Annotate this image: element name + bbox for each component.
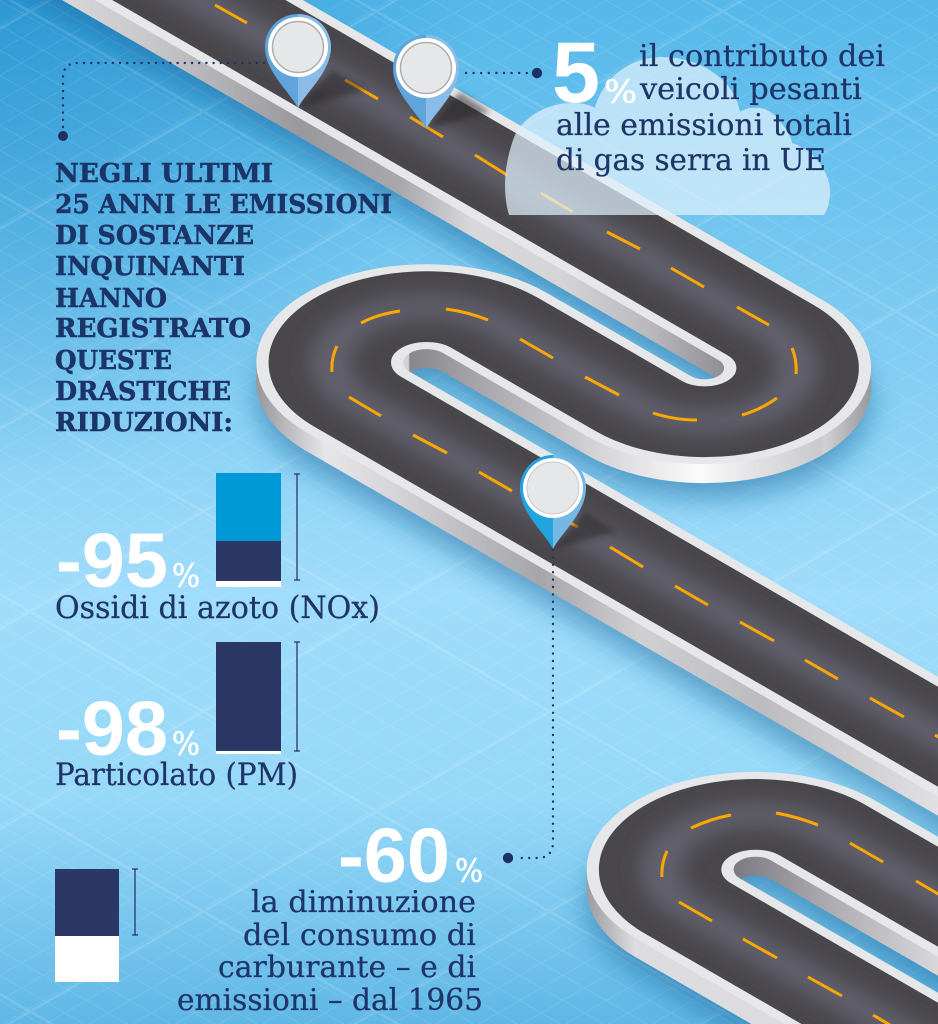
stat: -60% fuel consumption: la diminuzione (251, 885, 476, 920)
heading: DI SOSTANZE (55, 221, 254, 251)
bar chart: particulate (216, 642, 300, 754)
stat: 5% heavy vehicle contribution: veicoli pesanti (639, 72, 862, 107)
pin shadows on road (298, 70, 616, 549)
cloud (505, 57, 830, 215)
stat: -95% NOx (55, 518, 380, 626)
stat: -98% particulate: % (172, 725, 200, 763)
icon: map pin 1 (265, 14, 331, 108)
stat: 5% heavy vehicle contribution: il contributo dei (639, 39, 885, 74)
icon: map pin 2 (393, 35, 459, 129)
heading: QUESTE (55, 346, 172, 376)
stat: -60% fuel consumption (177, 813, 483, 1018)
yellow lane dashes (215, 5, 938, 1024)
heading: NEGLI ULTIMI (55, 159, 273, 189)
bar chart: NOx (216, 473, 300, 587)
stat: -98% particulate: -98 (56, 686, 168, 772)
stat: -95% NOx: % (172, 557, 200, 595)
stat: 5% heavy vehicle contribution: alle emissioni totali (556, 108, 852, 143)
stat: -60% fuel consumption: % (455, 852, 483, 890)
stat: 5% heavy vehicle contribution (552, 25, 885, 178)
stat: -95% NOx: Ossidi di azoto (NOx) (55, 590, 380, 626)
stat: -60% fuel consumption: del consumo di (243, 918, 476, 953)
icon: map pin 3 (520, 455, 586, 549)
heading: HANNO (55, 284, 167, 314)
stat: 5% heavy vehicle contribution: di gas serra in UE (556, 143, 826, 178)
heading (55, 159, 392, 438)
dotted connector: second pin to 5% (466, 68, 542, 78)
stat: 5% heavy vehicle contribution: % (604, 73, 637, 111)
dotted connector: third pin to -60% (503, 550, 553, 863)
heading: RIDUZIONI: (55, 408, 233, 438)
stat: -98% particulate (55, 686, 298, 793)
stat: -60% fuel consumption: carburante – e di (218, 950, 476, 985)
stat: -60% fuel consumption: -60 (338, 813, 450, 899)
heading: INQUINANTI (55, 252, 245, 282)
bar chart: fuel consumption (55, 869, 138, 982)
stat: -60% fuel consumption: emissioni – dal 1965 (177, 983, 483, 1018)
heading: DRASTICHE (55, 377, 231, 407)
heading: 25 ANNI LE EMISSIONI (55, 190, 392, 220)
stat: -98% particulate: Particolato (PM) (55, 757, 298, 793)
heading: REGISTRATO (55, 314, 251, 344)
stat: -95% NOx: -95 (56, 518, 168, 604)
stat: 5% heavy vehicle contribution: 5 (552, 25, 600, 121)
dotted connector: left pin to heading (58, 63, 264, 141)
